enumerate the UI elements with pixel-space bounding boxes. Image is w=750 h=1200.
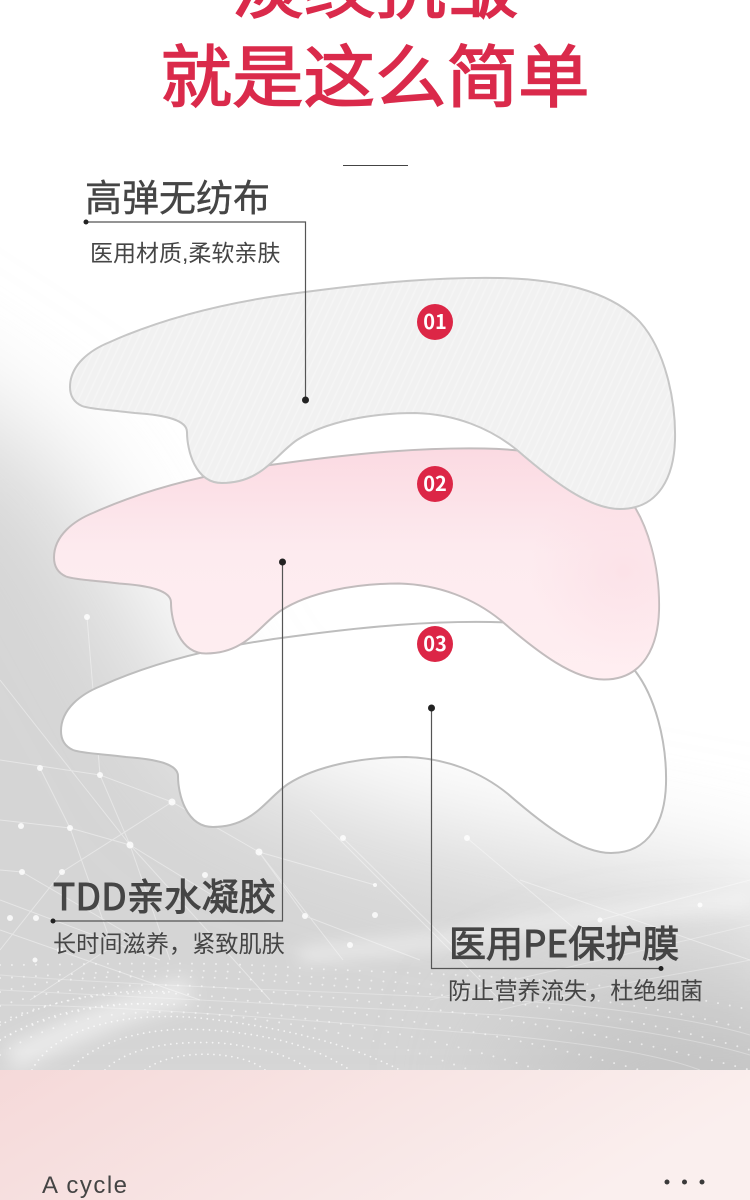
bottom pink band [0,1070,750,1200]
badge 02: 02 [423,468,447,497]
text: layer 3 description: 防止营养流失，杜绝细菌 [448,978,703,1004]
text: layer 2 description: 长时间滋养，紧致肌肤 [53,931,285,957]
leader line 02 [50,558,286,924]
mask layer 03 [61,622,666,853]
heading: layer 2: TDD亲水凝胶 [53,867,276,921]
leader line 03 [428,704,664,971]
badge 02 [417,466,453,502]
badge 03: 03 [423,628,447,657]
leader line 01 [84,220,309,404]
heading: layer 3: 医用PE保护膜 [449,914,679,968]
badge 01 [417,304,453,340]
badge 03 [417,626,453,662]
badge 01: 01 [423,306,447,335]
text: layer 1 description: 医用材质,柔软亲肤 [90,240,280,266]
title: 就是这么简单 [160,23,590,122]
mask layer 01 [70,278,675,509]
mask layer 02 [54,448,659,680]
footer label: A cycle [42,1172,129,1199]
heading: layer 1: 高弹无纺布 [85,168,270,222]
divider dash [343,164,408,166]
